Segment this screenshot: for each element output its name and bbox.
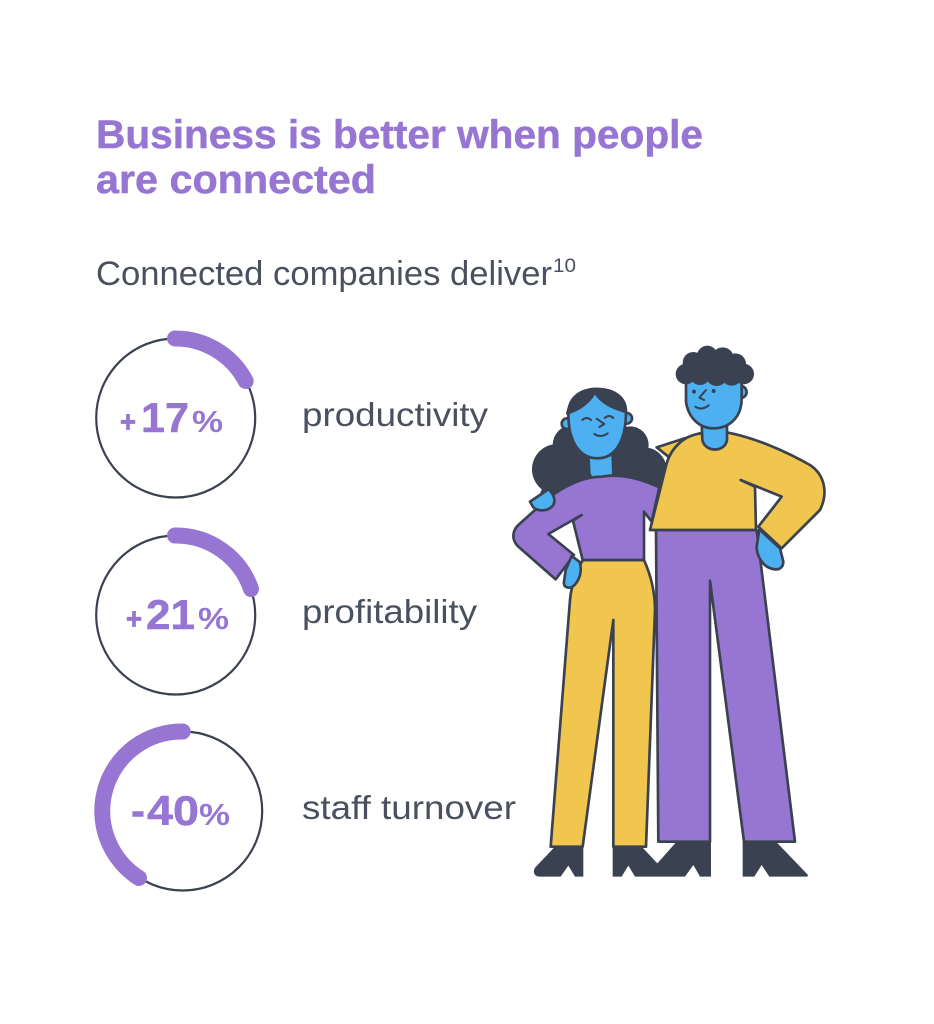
donut: +17% [96,338,255,498]
man arm behind [657,433,700,463]
donut: +21%: + [126,603,142,636]
man hair [676,346,754,386]
donut: +17%: 17 [141,394,189,441]
title: are connected [96,158,376,202]
donut: +17%: + [120,406,136,439]
donut: -40%: 40 [147,787,199,834]
donut: -40%: % [199,797,230,832]
stat: staff turnover [102,731,516,890]
man's hand on shoulder [530,489,554,510]
title: Business is better when people [96,113,703,157]
woman pants [551,560,655,847]
woman hair cap [567,389,625,413]
donut: +17%: % [192,404,223,439]
subtitle: Connected companies deliver [96,255,552,293]
title [96,113,703,202]
label: staff turnover: staff turnover [302,789,516,826]
woman hand [564,556,581,588]
label: productivity: productivity [302,396,489,433]
man ear [735,386,747,398]
donut: +21% [96,535,255,694]
woman head [568,389,626,458]
man face [695,390,709,409]
donut: +21%: % [198,601,229,636]
stat: profitability [96,535,478,694]
stat: productivity [96,338,489,498]
man neck [702,423,727,449]
woman top [513,476,659,579]
man [650,346,824,842]
shoes [534,842,808,877]
woman ears [562,413,632,429]
man hand [757,529,783,569]
woman face [582,416,613,436]
man shirt [650,433,824,548]
man head [686,377,742,428]
label: profitability: profitability [302,593,478,630]
woman [513,389,667,847]
man eyes [692,389,716,394]
donut: +21%: 21 [146,591,195,638]
donut: -40%: - [131,787,145,834]
subtitle: 10 [553,256,576,277]
woman hair [532,425,667,495]
donut: -40% [102,731,262,890]
illustration: two people [513,346,824,877]
man pants [656,530,795,842]
woman neck [588,455,613,481]
